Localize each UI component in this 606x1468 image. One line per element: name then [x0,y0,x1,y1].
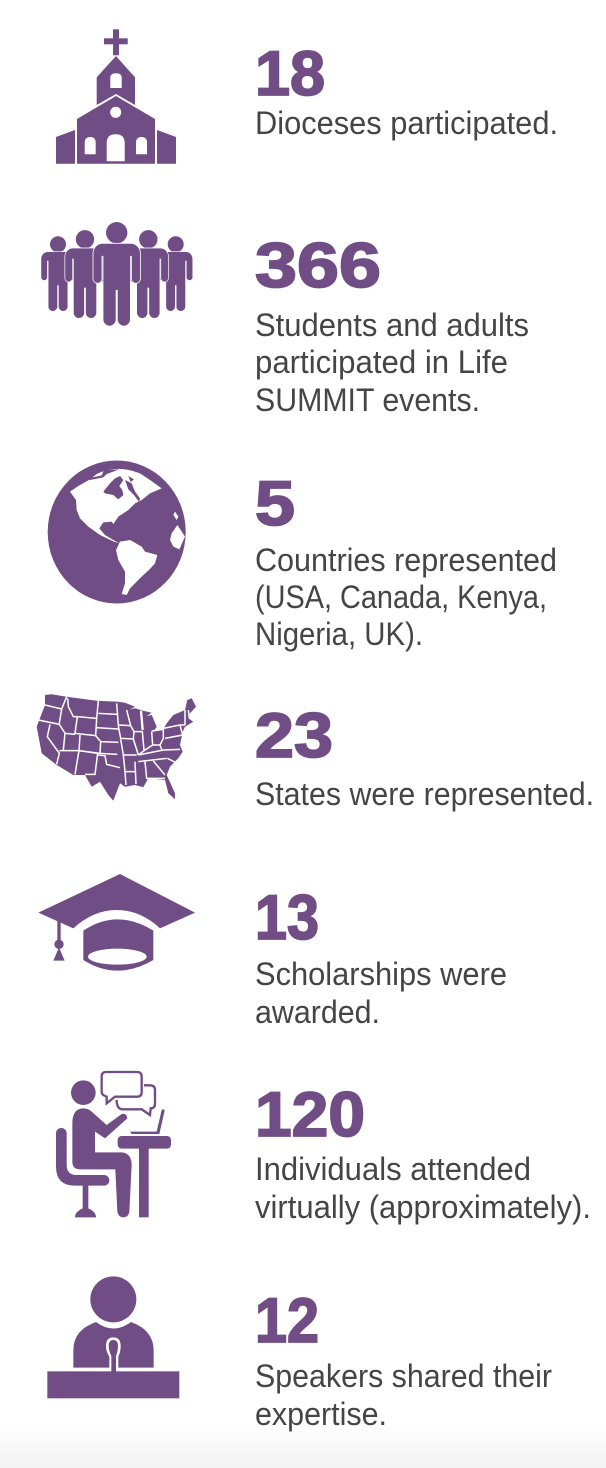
icon: person at laptop [56,1072,171,1217]
stat: speakers: Speakers shared their [255,1358,552,1394]
stat: scholarships: awarded. [255,994,380,1030]
stat: dioceses: 18 [255,39,325,109]
stat: participants: 366 [255,231,381,301]
stat: participants: participated in Life [255,344,508,380]
stat: scholarships: Scholarships were [255,956,507,992]
icon: group of people [41,222,193,326]
stat: countries: 5 [255,469,295,539]
stat: speakers: expertise. [255,1396,387,1432]
stat: states: States were represented. [255,776,594,812]
stat: states [255,701,594,812]
stat: participants: SUMMIT events. [255,382,480,418]
icon: church [56,29,176,164]
stat: dioceses: Dioceses participated. [255,105,558,141]
icon: graduation cap [38,874,195,971]
stat: countries: Countries represented [255,542,557,578]
stat: scholarships [255,883,507,1030]
stat: speakers: 12 [255,1286,319,1356]
stat: speakers [255,1286,552,1432]
stat: virtual attendees: Individuals attended [255,1151,531,1187]
icon: map of United States [37,694,196,801]
stat: countries: Nigeria, UK). [255,616,423,652]
stat: virtual attendees: 120 [255,1080,365,1150]
stat: virtual attendees: virtually (approximately). [255,1189,591,1225]
stat: virtual attendees [255,1080,591,1225]
stat: scholarships: 13 [255,883,319,953]
icon: globe [48,460,186,604]
stat: dioceses [255,39,558,141]
stat: countries: (USA, Canada, Kenya, [255,579,547,615]
stat: states: 23 [255,701,333,771]
stat: countries [255,469,557,652]
stat: participants: Students and adults [255,307,529,343]
stat: participants [255,231,529,418]
icon: speaker at podium [47,1276,179,1398]
